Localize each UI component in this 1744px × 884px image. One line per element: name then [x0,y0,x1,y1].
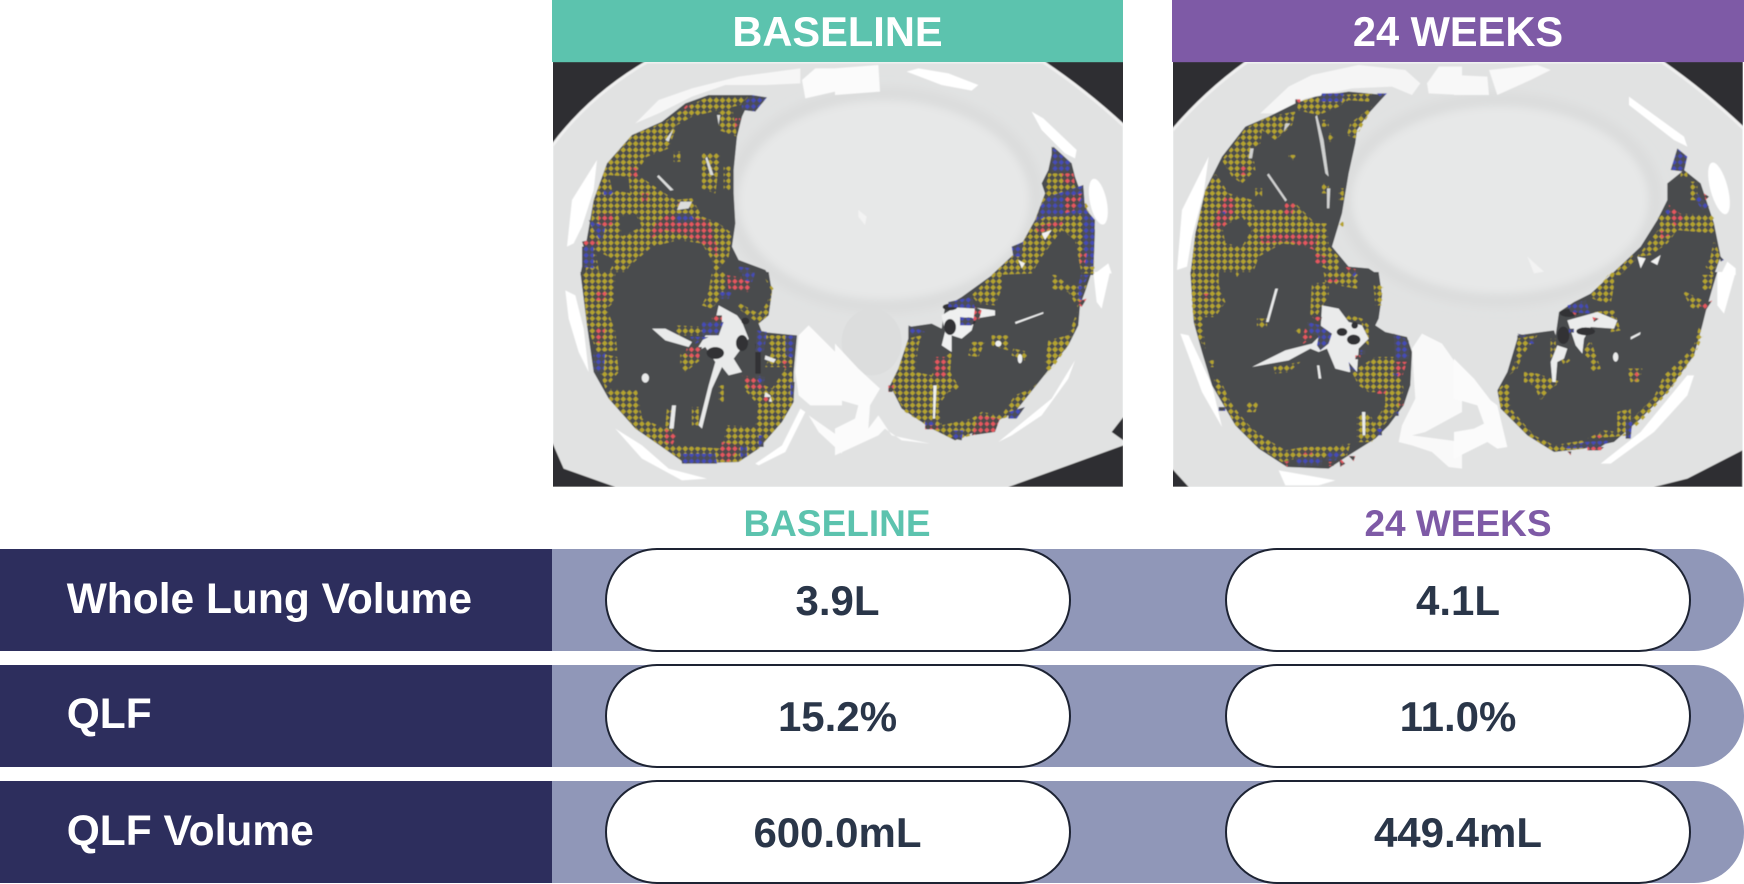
quadrant: upper left lung [1454,65,1736,275]
label: whole lung volume: Whole Lung Volume [67,576,472,623]
heading: 24 weeks: 24 WEEKS [1353,8,1563,55]
value: baseline QLF [604,664,1070,768]
row: QLF [0,664,1744,768]
value: 24 weeks QLF [1225,664,1691,768]
heading: baseline: BASELINE [732,8,943,55]
image: 24-week lung CT with overlay [1172,62,1744,487]
panel: baseline CT scan [552,0,1123,487]
value: 24 weeks whole lung volume [1225,548,1691,652]
label: QLF volume: QLF Volume [67,808,314,855]
image: baseline lung CT with overlay [552,62,1123,487]
quadrant: lower right lung [552,272,842,487]
quadrant: upper left lung [835,65,1112,275]
panel: 24 weeks CT scan [1172,0,1744,487]
row: whole lung volume [0,548,1744,652]
label: QLF: QLF [67,691,152,738]
heading: 24 weeks [1172,0,1744,62]
value: 24 weeks QLF: 11.0% [1400,693,1516,740]
value: 24 weeks whole lung volume: 4.1L [1416,577,1500,624]
value: baseline QLF volume [604,780,1070,884]
column label: 24 weeks: 24 WEEKS [1364,503,1552,544]
value: baseline whole lung volume: 3.9L [795,577,880,624]
column label: baseline: BASELINE [743,503,931,544]
heading: baseline [552,0,1123,62]
quadrant: lower right lung [1172,272,1462,487]
value: baseline QLF: 15.2% [778,693,897,740]
value: baseline QLF volume: 600.0mL [753,809,922,856]
row: QLF volume [0,780,1744,884]
quadrant: upper right lung [1177,65,1462,275]
value: 24 weeks QLF volume: 449.4mL [1374,809,1542,856]
quadrant: upper right lung [567,68,842,275]
value: baseline whole lung volume [604,548,1070,652]
quadrant: lower left lung [835,272,1123,487]
value: 24 weeks QLF volume [1225,780,1691,884]
quadrant: lower left lung [1454,272,1742,487]
